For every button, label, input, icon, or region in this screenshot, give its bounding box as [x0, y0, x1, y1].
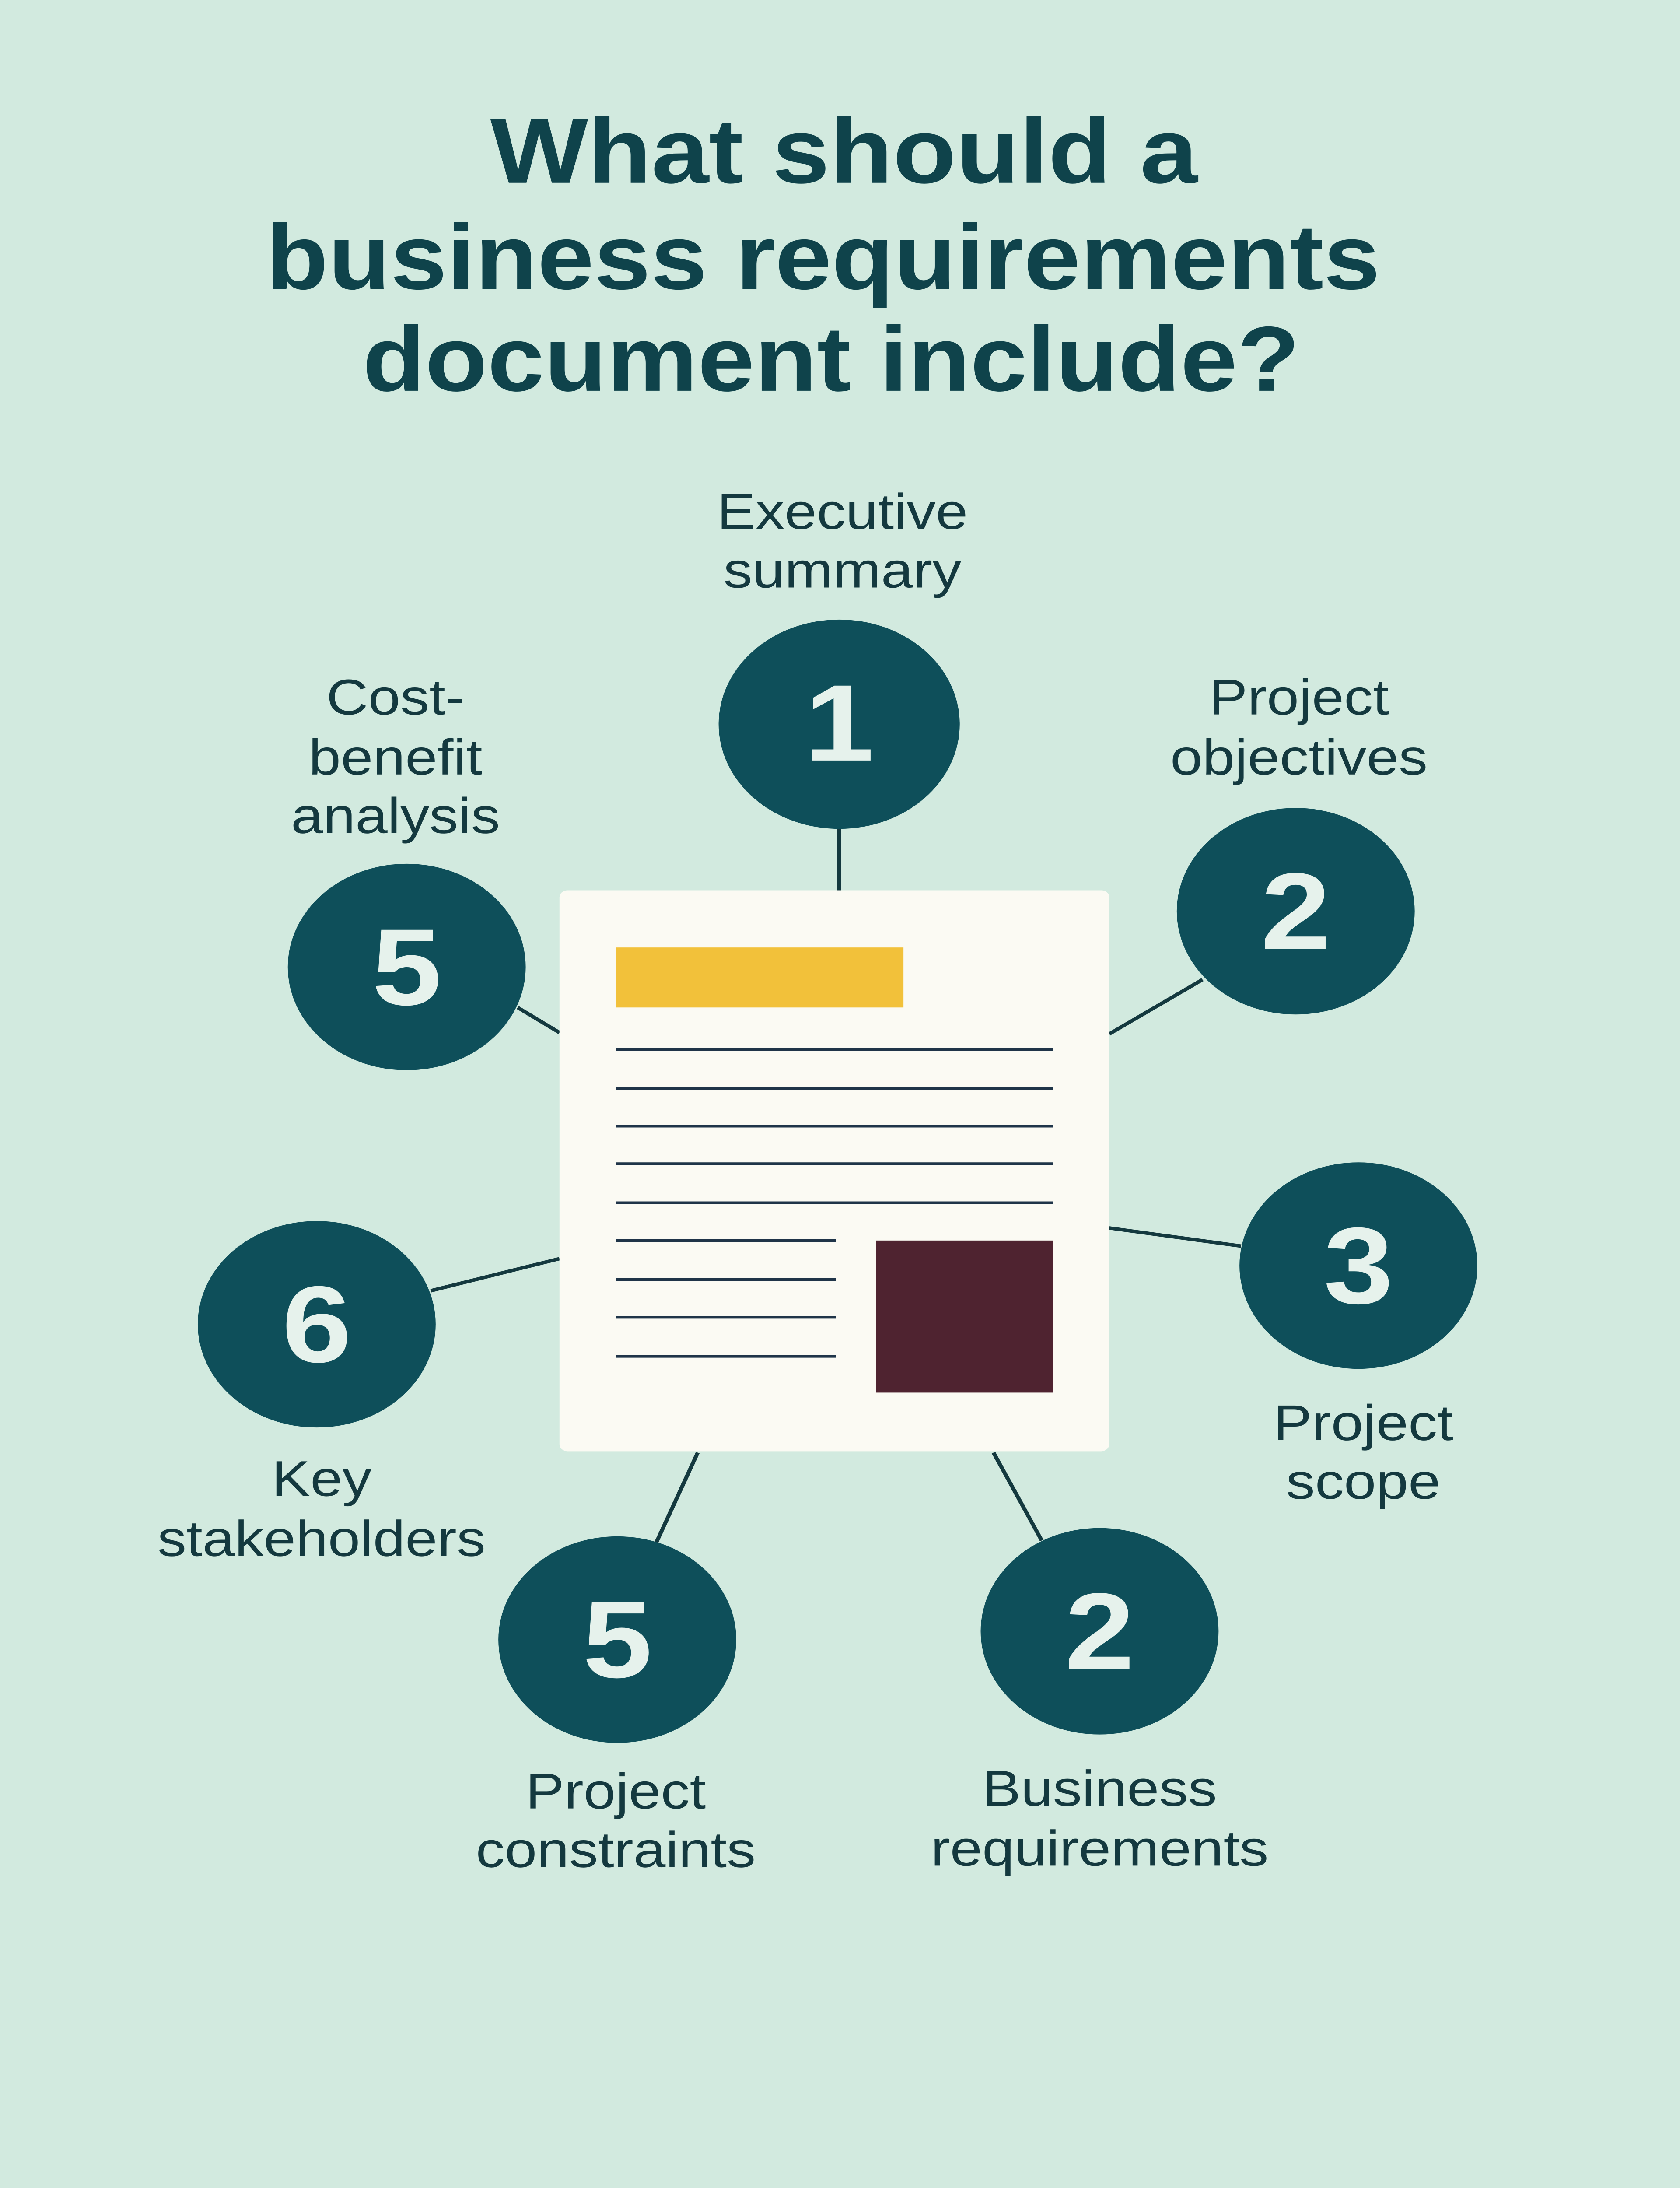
label: project scope: Project	[1273, 1395, 1453, 1451]
label: executive summary: Executive	[717, 484, 968, 540]
label: business requirements	[931, 1760, 1268, 1876]
circle 5 bottom	[498, 1536, 736, 1743]
circle 5 bottom: 5	[582, 1579, 652, 1701]
title: What should a	[490, 100, 1198, 203]
circle 5 top: 5	[372, 906, 441, 1028]
title: document include?	[363, 308, 1300, 410]
label: project scope	[1273, 1395, 1453, 1510]
circle 6	[198, 1221, 436, 1427]
label: project objectives: objectives	[1170, 729, 1428, 785]
label: project objectives	[1170, 670, 1428, 785]
circle 2 top right	[1177, 808, 1415, 1014]
label: project objectives: Project	[1209, 670, 1389, 726]
label: key stakeholders: stakeholders	[158, 1511, 486, 1567]
circle 2 top right: 2	[1261, 850, 1330, 972]
label: executive summary: summary	[724, 543, 962, 599]
label: cost-benefit analysis: Cost-	[326, 670, 465, 726]
label: key stakeholders: Key	[272, 1451, 371, 1507]
label: cost-benefit analysis: analysis	[291, 788, 500, 844]
circle 2 bottom: 2	[1065, 1571, 1134, 1692]
circle 1: 1	[804, 662, 874, 784]
maroon image block	[876, 1241, 1053, 1392]
document	[560, 890, 1110, 1451]
circle 5 top	[288, 864, 526, 1070]
label: cost-benefit analysis	[291, 670, 500, 844]
label: project constraints: constraints	[476, 1822, 756, 1878]
circle 1	[719, 620, 960, 829]
label: project constraints: Project	[526, 1764, 706, 1820]
label: project constraints	[476, 1764, 756, 1878]
title: business requirements	[266, 206, 1380, 309]
label: business requirements: Business	[982, 1760, 1217, 1816]
label: business requirements: requirements	[931, 1821, 1268, 1876]
connectors	[431, 829, 1241, 1543]
circle 6: 6	[282, 1263, 352, 1385]
label: project scope: scope	[1286, 1454, 1441, 1510]
label: key stakeholders	[158, 1451, 486, 1567]
label: cost-benefit analysis: benefit	[308, 729, 483, 785]
title	[266, 100, 1380, 410]
circle 3	[1239, 1162, 1477, 1369]
circle 2 bottom	[981, 1528, 1218, 1735]
label: executive summary	[717, 484, 968, 599]
circle 3: 3	[1323, 1205, 1393, 1326]
yellow header bar	[616, 947, 903, 1007]
